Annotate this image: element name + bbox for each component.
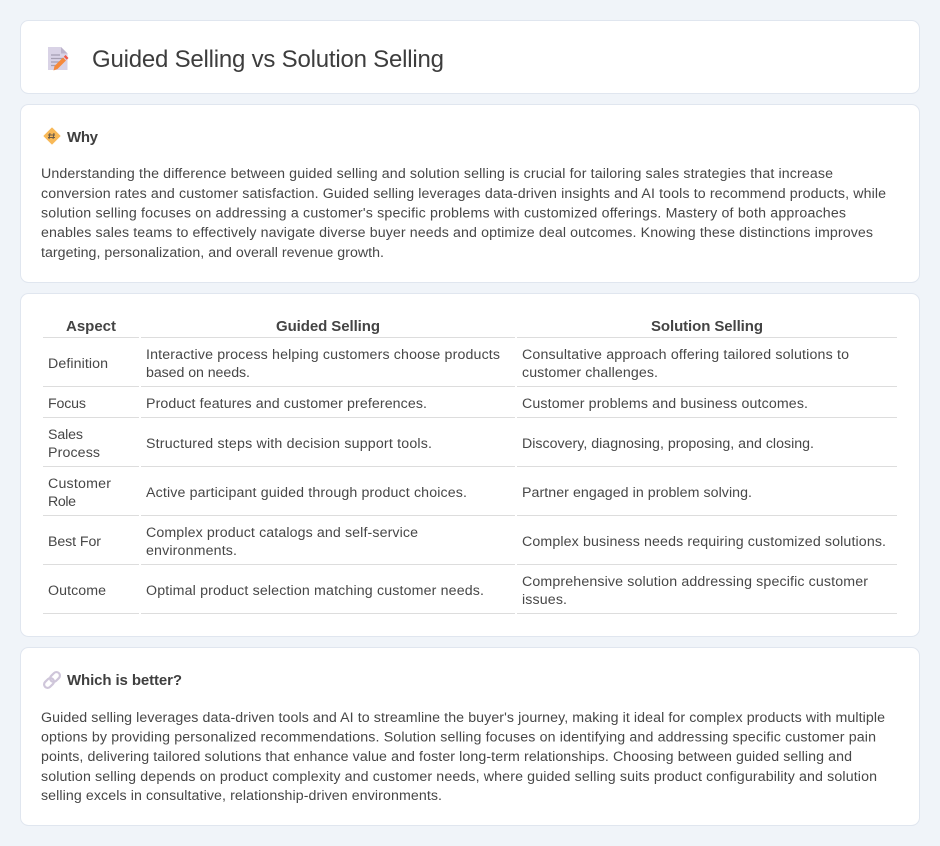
row: outcome: issues. (522, 592, 567, 608)
row: customer role (48, 476, 752, 510)
row: focus: Customer problems and business outcomes. (522, 396, 808, 412)
row: best for: Complex business needs requiring customized solutions. (522, 534, 886, 550)
heading: why: Why (67, 129, 99, 146)
table header row (66, 318, 763, 335)
row: outcome: Optimal product selection matching customer needs. (146, 583, 484, 599)
row: sales process: Process (48, 445, 100, 461)
row: best for (48, 525, 886, 559)
row: definition: Definition (48, 356, 108, 372)
row: focus: Focus (48, 396, 86, 412)
panel: title header (20, 20, 920, 94)
row: outcome: Outcome (48, 583, 106, 599)
text block: which is better explanation: options by providing personalized recommendations. Solution selling focuses on identifying and addressing specific customer pain (41, 730, 876, 746)
panel: which is better (20, 648, 920, 826)
row: customer role: Partner engaged in problem solving. (522, 485, 752, 501)
icon: chain link (43, 671, 61, 689)
icon: warning diamond (44, 128, 60, 144)
row: definition: based on needs. (146, 365, 250, 381)
row: definition: customer challenges. (522, 365, 658, 381)
row: customer role: Role (48, 494, 76, 510)
row: customer role: Active participant guided through product choices. (146, 485, 467, 501)
row: outcome (48, 574, 868, 608)
text block: which is better explanation (41, 710, 885, 804)
icon: document with pencil (48, 47, 68, 70)
text block: why explanation: enables sales teams to effectively navigate diverse buyer needs and optimize deal outcomes. Knowing these distinctions improves (41, 225, 873, 241)
row: best for: Complex product catalogs and self-service (146, 525, 418, 541)
row: best for: Best For (48, 534, 101, 550)
text block: why explanation: solution selling focuses on addressing a customer's specific problems with customized offerings. Mastery of both approaches (41, 206, 846, 222)
row: customer role: Customer (48, 476, 111, 492)
panel: why (20, 104, 920, 282)
row: outcome: Comprehensive solution addressing specific customer (522, 574, 868, 590)
text block: why explanation: targeting, personalization, and overall revenue growth. (41, 245, 384, 261)
table header row: Solution Selling (651, 318, 763, 335)
table header row: Aspect (66, 318, 116, 335)
row: sales process: Structured steps with decision support tools. (146, 436, 432, 452)
row: sales process (48, 427, 814, 461)
text block: which is better explanation: selling excels in consultative, relationship-driven environments. (41, 788, 442, 804)
text block: why explanation (41, 166, 886, 261)
panel: comparison table (20, 294, 920, 636)
text block: which is better explanation: solution selling depends on product complexity and customer needs, where guided selling suits product configurability and solution (41, 769, 877, 785)
row: best for: environments. (146, 543, 237, 559)
text block: which is better explanation: Guided selling leverages data-driven tools and AI to streamline the buyer's journey, making it ideal for complex products with multiple (41, 710, 885, 726)
row: definition (48, 347, 849, 381)
row: focus: Product features and customer preferences. (146, 396, 427, 412)
row: sales process: Discovery, diagnosing, proposing, and closing. (522, 436, 814, 452)
table header row: Guided Selling (276, 318, 380, 335)
row: definition: Interactive process helping customers choose products (146, 347, 500, 363)
text block: why explanation: conversion rates and customer satisfaction. Guided selling leverages data-driven insights and AI tools to recommend products, while (41, 186, 886, 202)
heading: which is better: Which is better? (67, 672, 182, 689)
title: Guided Selling vs Solution Selling (92, 46, 444, 73)
row: focus (48, 396, 808, 412)
text block: why explanation: Understanding the difference between guided selling and solution selling is crucial for tailoring sales strategies that increase (41, 166, 833, 182)
row: sales process: Sales (48, 427, 83, 443)
text block: which is better explanation: points, delivering tailored solutions that enhance value and foster long-term relationships. Choosing between guided selling and (41, 749, 852, 765)
row: definition: Consultative approach offering tailored solutions to (522, 347, 849, 363)
